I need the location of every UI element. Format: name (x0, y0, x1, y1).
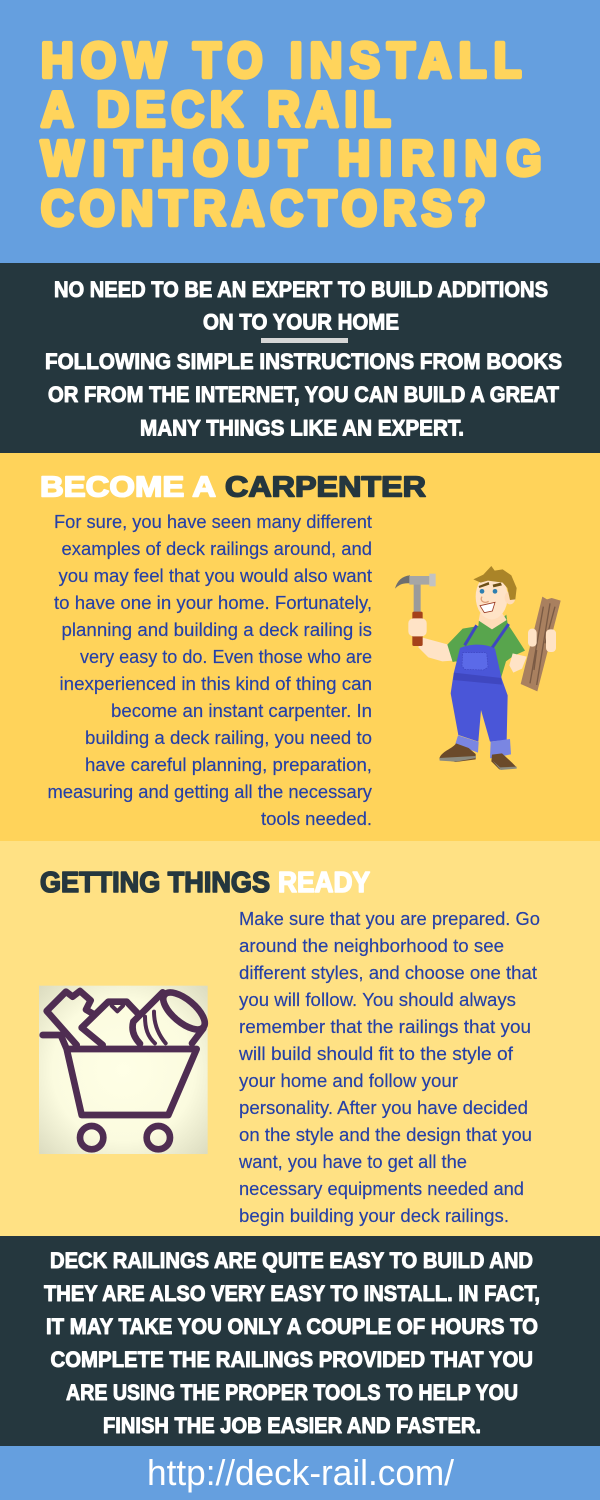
heading: become a carpenter: BECOME A (40, 472, 216, 504)
title (41, 32, 541, 235)
icon part: blue overalls (451, 624, 511, 758)
title: HOW TO INSTALL (41, 32, 521, 87)
closing text block: FINISH THE JOB EASIER AND FASTER. (103, 1413, 481, 1438)
ready text block: will build should fit to the style of (238, 1044, 514, 1064)
carpenter text block: building a deck railing, you need to (85, 728, 372, 748)
divider bar (261, 338, 348, 343)
ready text block: want, you have to get all the (238, 1152, 467, 1172)
icon part: wooden board (521, 597, 561, 691)
intro text (45, 349, 562, 440)
heading: become a carpenter (40, 472, 426, 504)
title: WITHOUT HIRING (41, 130, 541, 185)
ready text block: on the style and the design that you (239, 1125, 532, 1145)
ready text block: you will follow. You should always (239, 990, 516, 1010)
title: CONTRACTORS? (41, 180, 485, 235)
carpenter text block: tools needed. (261, 809, 372, 829)
ready text block: begin building your deck railings. (239, 1206, 509, 1226)
closing text block: COMPLETE THE RAILINGS PROVIDED THAT YOU (50, 1347, 533, 1372)
carpenter text block: to have one in your home. Fortunately, (54, 593, 372, 613)
heading: become a carpenter: CARPENTER (225, 472, 426, 504)
icon part: brown shoes (439, 743, 517, 770)
panel: getting things ready (0, 841, 600, 1236)
ready text block (238, 909, 540, 1226)
panel: website footer (0, 1446, 600, 1500)
website url: http://deck-rail.com/ (147, 1452, 454, 1493)
carpenter text block (48, 512, 372, 829)
carpenter text block: examples of deck railings around, and (62, 539, 372, 559)
icon part: green shirt (447, 615, 525, 678)
ready text block: remember that the railings that you (239, 1017, 531, 1037)
closing text block: THEY ARE ALSO VERY EASY TO INSTALL. IN FACT, (44, 1281, 540, 1306)
panel: introduction (0, 263, 600, 453)
carpenter text block: planning and building a deck railing is (62, 620, 372, 640)
intro heading: ON TO YOUR HOME (203, 310, 399, 334)
panel: become a carpenter (0, 453, 600, 841)
carpenter text block: become an instant carpenter. In (111, 701, 372, 721)
closing text block: IT MAY TAKE YOU ONLY A COUPLE OF HOURS TO (46, 1314, 538, 1339)
carpenter text block: very easy to do. Even those who are (80, 647, 372, 667)
icon part: right arm and hand (509, 629, 556, 673)
intro text: OR FROM THE INTERNET, YOU CAN BUILD A GREAT (48, 382, 560, 407)
icon part: head and face (473, 566, 517, 629)
ready text block: your home and follow your (239, 1071, 458, 1091)
intro text: MANY THINGS LIKE AN EXPERT. (140, 416, 464, 440)
carpenter text block: inexperienced in this kind of thing can (60, 674, 372, 694)
closing text block: DECK RAILINGS ARE QUITE EASY TO BUILD AND (50, 1248, 533, 1273)
ready text block: Make sure that you are prepared. Go (239, 909, 540, 929)
ready text block: different styles, and choose one that (239, 963, 537, 983)
carpenter text block: measuring and getting all the necessary (48, 782, 372, 802)
intro heading: NO NEED TO BE AN EXPERT TO BUILD ADDITIONS (54, 277, 548, 302)
closing text block: ARE USING THE PROPER TOOLS TO HELP YOU (66, 1380, 518, 1405)
icon part: raised arm (418, 637, 452, 661)
title: A DECK RAIL (41, 81, 391, 136)
panel: closing statement (0, 1236, 600, 1446)
panel: title banner (0, 0, 600, 263)
icon: shopping cart full of supplies (39, 986, 211, 1154)
ready text block: personality. After you have decided (239, 1098, 528, 1118)
intro text: FOLLOWING SIMPLE INSTRUCTIONS FROM BOOKS (45, 349, 562, 374)
ready text block: necessary equipments needed and (239, 1179, 524, 1199)
intro heading (54, 277, 548, 334)
heading: getting things ready: READY (278, 867, 370, 899)
icon part: hammer (395, 574, 436, 646)
ready text block: around the neighborhood to see (239, 936, 504, 956)
closing text block (44, 1248, 540, 1438)
carpenter text block: have careful planning, preparation, (85, 755, 372, 775)
heading: getting things ready: GETTING THINGS (40, 867, 270, 899)
carpenter text block: you may feel that you would also want (58, 566, 372, 586)
carpenter text block: For sure, you have seen many different (54, 512, 372, 532)
icon: carpenter with hammer and wood board (395, 566, 561, 770)
